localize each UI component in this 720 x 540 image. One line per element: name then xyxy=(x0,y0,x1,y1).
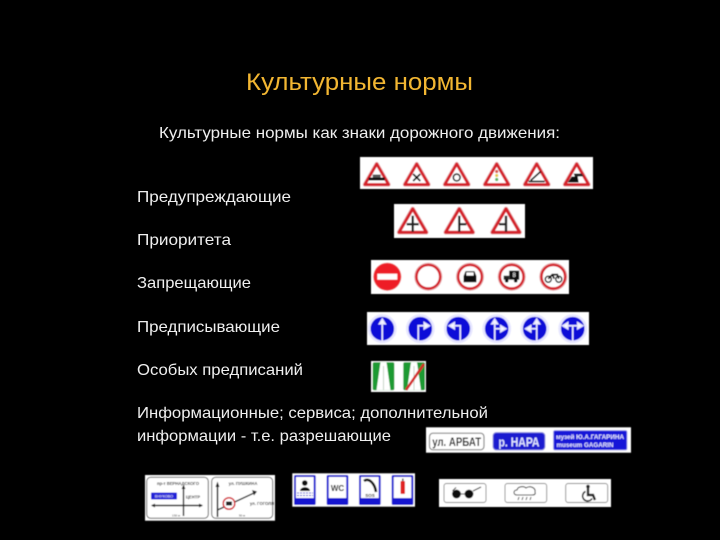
icon: turn left xyxy=(445,315,472,342)
icon: turn right xyxy=(407,315,434,342)
sign: museum: museum GAGARIN xyxy=(556,442,614,449)
title: Культурные нормы xyxy=(246,69,473,96)
label: information signs: Информационные; сервиса; дополнительной xyxy=(137,405,488,422)
sign: beach xyxy=(294,475,316,505)
sign: river name: р. НАРА xyxy=(498,436,540,450)
label: warning signs: Предупреждающие xyxy=(137,189,291,206)
sign: crossroads scheme xyxy=(147,477,208,518)
icon: traffic light warning xyxy=(485,164,508,184)
sign: crossroads scheme: ЦЕНТР xyxy=(186,494,200,500)
icon: straight or right xyxy=(483,315,510,342)
icon: no trucks xyxy=(498,263,526,291)
icon: tram warning xyxy=(365,164,388,184)
icon: no vehicles xyxy=(414,263,442,291)
panel: warning signs xyxy=(360,157,593,189)
sign: route restriction scheme: 50 м xyxy=(239,514,245,518)
sign: fire extinguisher xyxy=(392,475,413,505)
icon: no motorcycles xyxy=(539,263,567,291)
icon: end of motorway xyxy=(403,362,425,390)
icon: straight or left xyxy=(521,315,548,342)
icon: no trucks: 8 xyxy=(513,273,517,279)
subtitle: Культурные нормы как знаки дорожного движения: xyxy=(159,125,560,142)
sign: SOS phone: SOS xyxy=(365,493,375,498)
panel: priority signs xyxy=(394,204,525,238)
sign: street name: ул. АРБАТ xyxy=(432,437,481,449)
panel: name signs xyxy=(426,427,631,453)
sign: crossroads scheme: 150 м xyxy=(172,514,180,518)
sign: museum: музей Ю.А.ГАГАРИНА xyxy=(556,433,624,441)
icon: roundabout warning xyxy=(445,164,468,184)
sign: WC: WC xyxy=(331,484,344,493)
icon: side road right xyxy=(446,209,473,232)
panel: motorway signs xyxy=(371,361,426,392)
panel: prohibitory signs xyxy=(371,260,569,294)
sign: blind pedestrians xyxy=(444,484,486,502)
icon: motorway xyxy=(373,362,394,390)
icon: priority crossing xyxy=(399,209,426,232)
sign: route restriction scheme xyxy=(212,477,274,518)
sign: route restriction scheme: ул. ГОГОЛЯ xyxy=(250,501,274,506)
sign: museum xyxy=(554,430,627,450)
sign: crossroads scheme: ВНУКОВО xyxy=(155,495,173,499)
icon: barrier warning xyxy=(525,164,548,184)
panel: direction signs xyxy=(145,475,275,521)
icon: embankment warning xyxy=(565,164,588,184)
panel: mandatory signs xyxy=(367,312,589,345)
icon: crossroads warning xyxy=(405,164,428,184)
sign: crossroads scheme: пр-т ВЕРНАДСКОГО xyxy=(157,481,200,486)
icon: side road left xyxy=(492,209,520,232)
sign: wheelchair xyxy=(566,484,608,502)
category list xyxy=(137,189,488,445)
sign: river name xyxy=(493,432,545,450)
label: prohibitory signs: Запрещающие xyxy=(137,275,251,292)
sign: street name xyxy=(430,433,484,450)
sign: rain xyxy=(505,484,547,502)
label: priority signs: Приоритета xyxy=(137,232,231,249)
label: special regulation signs: Особых предписаний xyxy=(137,362,303,379)
panel: additional info signs xyxy=(439,479,611,507)
icon: straight only xyxy=(369,315,396,342)
label: mandatory signs: Предписывающие xyxy=(137,319,280,336)
panel: service signs xyxy=(292,473,415,507)
label: information signs: информации - т.е. разрешающие xyxy=(137,428,391,445)
icon: no cars xyxy=(456,263,484,291)
label: information signs xyxy=(137,405,488,445)
icon: no entry xyxy=(373,263,401,291)
sign: route restriction scheme: ул. ПУШКИНА xyxy=(229,481,257,486)
icon: left or right xyxy=(559,315,586,342)
